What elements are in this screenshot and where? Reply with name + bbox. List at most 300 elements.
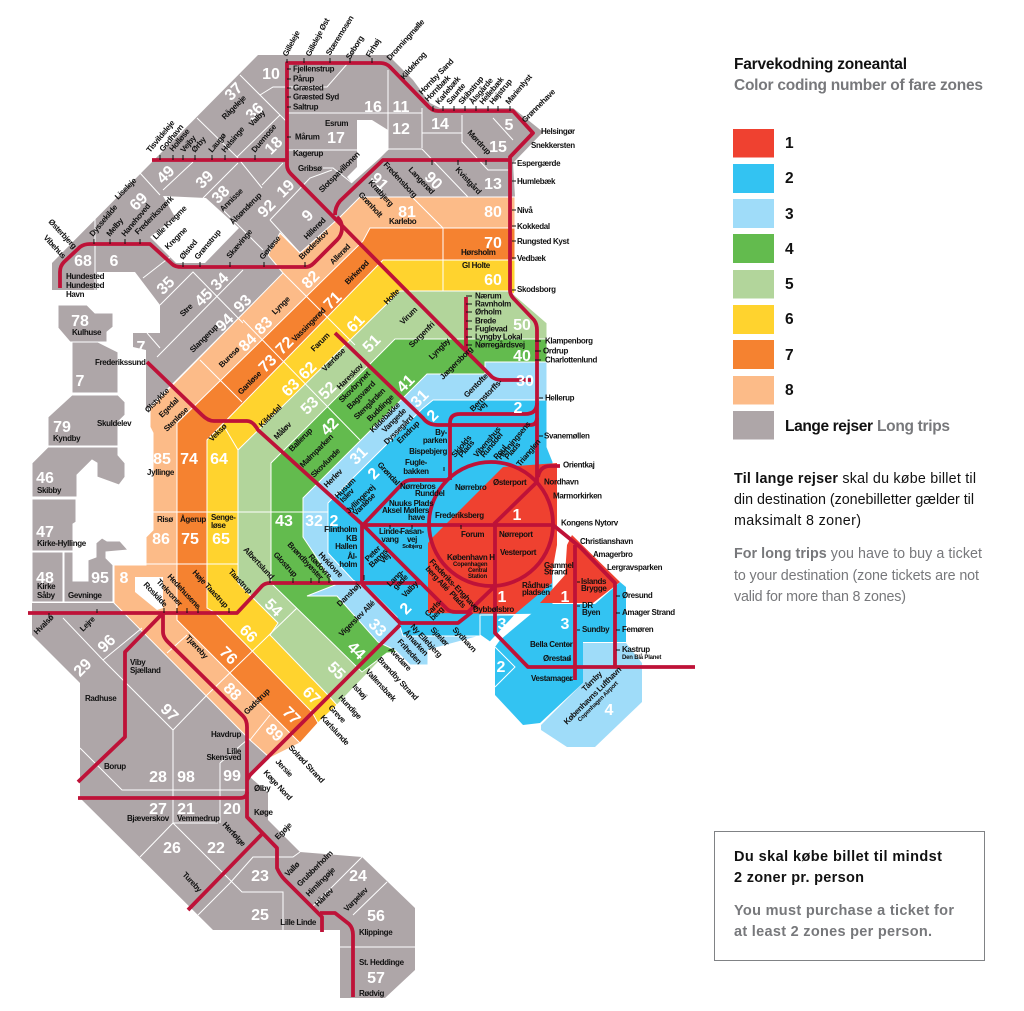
zone numbers: 21 <box>177 801 195 818</box>
zone numbers: 57 <box>367 970 385 987</box>
text: long trips note in English: to your destination (zone tickets are not <box>734 568 979 584</box>
station names: rotated up-right: Ganløse <box>236 369 264 396</box>
line: Flintholm south <box>360 525 364 584</box>
legend: colour swatches: 6 <box>785 311 794 328</box>
station names: rotated down-right: Enghave <box>453 583 481 613</box>
station names: rotated up-right: Vigerslev Allé <box>337 598 377 638</box>
station names: west Zealand: Gevninge <box>68 591 103 600</box>
station names: rotated up-right: Egøje <box>273 820 294 841</box>
station names: horizontal north and coast: Ørholm <box>475 308 502 316</box>
zone numbers: 85 <box>153 451 171 468</box>
station names: rotated up-right: Helsinge <box>220 124 247 154</box>
zone numbers: 93 <box>231 292 255 316</box>
zone numbers: 14 <box>431 116 449 133</box>
station names: horizontal north and coast: Kongens Nytorv <box>561 518 619 528</box>
zone numbers: 10 <box>262 66 280 83</box>
station names: rotated up-right: Sorgenfri <box>407 320 436 349</box>
station names: rotated up-right: Gadstrup <box>242 687 272 716</box>
line: Naerum <box>464 297 468 350</box>
zone numbers: 1 <box>498 589 507 606</box>
zone numbers: 27 <box>149 801 167 818</box>
station names: central Copenhagen: København H <box>447 553 495 562</box>
station names: rotated down-right: Brøndbyøster <box>286 540 325 582</box>
station names: central Copenhagen: Flintholm <box>324 525 357 534</box>
station names: rotated up-right: Melby <box>105 216 126 238</box>
zone numbers: 67 <box>299 684 323 708</box>
station names: rotated up-right: Birkerød <box>343 258 371 286</box>
zone numbers: 23 <box>251 868 269 885</box>
station names: rotated up-right: Ballerup <box>287 426 314 453</box>
station names: rotated up-right: Lejre <box>78 614 97 633</box>
station names: rotated up-right: Stæremosen <box>324 14 356 57</box>
line: Koge north <box>362 584 472 623</box>
station names: rotated up-right: Stengården <box>352 386 387 421</box>
station names: horizontal north and coast: Gribsø <box>298 164 322 173</box>
station names: rotated up-right: Hareskov <box>335 361 366 391</box>
legend: colour swatches: 3 <box>785 206 794 223</box>
station names: rotated up-right: Duemose <box>250 122 279 154</box>
station names: horizontal north and coast: Espergærde <box>517 159 561 168</box>
station names: rotated down-right: Glostrup <box>272 550 299 579</box>
station names: rotated down-right: Vibehus <box>42 233 68 261</box>
zones: ring 8 <box>114 197 515 758</box>
station names: rotated up-right: Ølsted <box>178 238 199 261</box>
zone numbers: 2 <box>497 659 506 676</box>
station names: rotated up-right: Slotspavillonen <box>317 150 362 194</box>
station names: Amager: Femøren <box>622 625 654 634</box>
station names: rotated up-right: Marienlyst <box>504 72 534 106</box>
station names: west Zealand: Kulhuse <box>72 328 102 337</box>
station names: horizontal north and coast: Orientkaj <box>563 460 595 470</box>
zone numbers: 1 <box>513 507 522 524</box>
line: Fredensborg <box>335 160 510 215</box>
text: long trips note in Danish: Til lange rejser skal du købe billet til <box>734 471 976 487</box>
zone numbers: 73 <box>256 352 280 376</box>
station names: horizontal north and coast: Snekkersten <box>531 141 575 150</box>
station names: central Copenhagen: pladsen <box>522 588 550 597</box>
zones: ring 1 centre <box>428 463 557 614</box>
legend: colour swatches: 2 <box>785 170 794 187</box>
holes in north zones <box>150 120 388 263</box>
station names: rotated up-right: Malmparken <box>298 432 335 469</box>
zone numbers: 38 <box>209 183 233 207</box>
legend: colour swatches: 8 <box>785 382 794 399</box>
station names: rotated up-right: Plads <box>457 438 477 459</box>
station names: rotated down-right: Tjæreby <box>184 633 210 661</box>
station names: central Copenhagen: Ål- <box>347 552 358 561</box>
station names: central Copenhagen: Aksel Møllers <box>382 506 430 515</box>
station names: horizontal north and coast: Lyngby Lokal <box>475 332 522 342</box>
station names: central Copenhagen: Bispebjerg <box>409 447 447 456</box>
station names: rotated down-right: Fredensborg <box>382 160 419 200</box>
zone numbers: 33 <box>365 616 389 640</box>
station names: Amager: Øresund <box>622 591 653 600</box>
station names: rotated up-right: Måløv <box>272 420 294 441</box>
station names: west Zealand: løse <box>211 521 227 530</box>
zone numbers: 66 <box>236 622 260 646</box>
station names: horizontal north and coast: Fjellenstrup <box>293 64 335 74</box>
station names: rotated down-right <box>42 128 493 895</box>
station names: Amager: Vestamager <box>531 674 573 683</box>
transit lines <box>28 63 695 997</box>
station names: Amager: Tårnby <box>580 669 604 693</box>
station names: rotated up-right: Karlebæk <box>434 74 463 106</box>
zone numbers: 7 <box>76 373 85 390</box>
station names: Amager: Sundby <box>582 625 610 634</box>
zone numbers: 20 <box>223 801 241 818</box>
line: Kege west <box>78 792 247 798</box>
station names: rotated down-right: Hvidovre <box>317 550 345 580</box>
station names: central Copenhagen: Linde- <box>379 527 402 536</box>
station names: horizontal north and coast: Hundested <box>66 281 105 290</box>
station names: horizontal north and coast: Svanemøllen <box>544 432 590 440</box>
zone numbers: 45 <box>192 286 216 310</box>
station names: central Copenhagen: vej <box>407 535 417 544</box>
station names: central Copenhagen: Fugle- <box>405 458 428 467</box>
station names: west Zealand: St. Heddinge <box>359 958 405 967</box>
station names: horizontal north and coast: Nærum <box>475 292 501 300</box>
zone numbers: 71 <box>321 289 345 313</box>
zones: long trips north <box>52 55 543 410</box>
line: Rodvig branch <box>320 913 353 997</box>
station names: Amager: Brygge <box>581 584 607 593</box>
zone numbers: 83 <box>252 314 276 338</box>
station names: rotated up-right: Holløse <box>168 127 192 153</box>
station names: rotated down-right: Køge Nord <box>262 768 294 802</box>
station names: rotated up-right: Rågeleje <box>220 93 248 121</box>
station names: west Zealand: Risø <box>157 515 173 524</box>
zone numbers: 86 <box>152 531 170 548</box>
station names: Amager: Ørestad <box>543 654 571 663</box>
zone numbers: 2 <box>514 400 523 417</box>
station names: rotated down-right: Albertslund <box>242 545 276 581</box>
station names: central Copenhagen: Nørrebros <box>400 482 436 491</box>
station names: west Zealand: Borup <box>104 762 126 771</box>
zone numbers: 69 <box>127 190 151 214</box>
station names: rotated up-right: Lang- <box>385 567 406 588</box>
station names: rotated up-right: Henningsens <box>496 419 533 461</box>
zone numbers: 40 <box>513 348 531 365</box>
zone numbers: 91 <box>367 170 391 194</box>
station names: west Zealand: Køge <box>254 808 274 817</box>
zone numbers: 46 <box>36 470 54 487</box>
station names: horizontal north and coast: Karlebo <box>389 217 417 226</box>
zone numbers: 12 <box>392 121 410 138</box>
station names: west Zealand: Viby <box>130 658 146 667</box>
station names: rotated up-right: Dronningmølle <box>385 17 427 62</box>
station names: horizontal north and coast: Kokkedal <box>517 222 550 231</box>
station names: central Copenhagen: holm <box>339 560 357 569</box>
station names: horizontal north and coast: Mårum <box>295 132 320 142</box>
station names: horizontal north and coast: Esrum <box>325 119 348 128</box>
station names: rotated up-right: Saunte <box>445 81 468 106</box>
legend: colour swatches: 4 <box>785 241 794 258</box>
station names: rotated down-right: Frederiks- <box>428 557 459 590</box>
zone numbers: 64 <box>210 451 228 468</box>
station ticks <box>49 58 620 680</box>
zone numbers: 36 <box>243 100 267 124</box>
station names: rotated down-right: Sydhavn <box>451 625 479 654</box>
station names: rotated up-right: Holte <box>382 287 402 306</box>
station names: central Copenhagen: parken <box>423 436 447 445</box>
zone numbers <box>36 66 614 987</box>
zone numbers: 6 <box>110 253 119 270</box>
station names: rotated down-right: Rødovre <box>307 552 334 581</box>
station names: rotated up-right: Skovlunde <box>309 446 342 479</box>
station names: rotated up-right: Varpelev <box>342 885 370 913</box>
line: Amager vertical <box>573 545 577 680</box>
station names: Amager: Kastrup <box>622 645 650 654</box>
zone numbers: 56 <box>367 908 385 925</box>
zone numbers: 7 <box>137 339 146 356</box>
zone numbers: 61 <box>344 312 368 336</box>
station names: rotated up-right: Himlingøje <box>304 865 337 898</box>
line: Frederikssund west <box>147 362 615 667</box>
station names: rotated down-right: Ny Ellebjerg <box>409 622 444 659</box>
zone numbers: 29 <box>71 656 95 680</box>
station names: west Zealand: Lille <box>227 747 242 756</box>
station names: rotated up-right: Farum <box>309 331 332 353</box>
station names: rotated up-right: Danshøj <box>335 581 362 608</box>
legend: colour swatches: Long trips <box>877 418 950 435</box>
legend: colour swatches: Lange rejser <box>785 418 873 435</box>
fare zone map <box>28 14 695 998</box>
zones: ring 4 <box>271 339 547 672</box>
station names: central Copenhagen: Rådhus- <box>522 581 552 590</box>
legend: colour swatches: 7 <box>785 347 794 364</box>
zone numbers: 37 <box>222 80 246 104</box>
zone numbers: 77 <box>279 704 303 728</box>
station names: rotated down-right: Sjælør <box>429 625 451 648</box>
zone numbers: 24 <box>349 868 367 885</box>
station names: horizontal north and coast: Nørregårdsvej <box>475 340 525 350</box>
station names: horizontal north and coast: Nordhavn <box>544 478 579 486</box>
zone numbers: 31 <box>347 444 371 468</box>
legend heading: Farvekodning zoneantal <box>734 56 907 73</box>
zone numbers: 25 <box>251 907 269 924</box>
station names: Amager: Københavns Lufthavn <box>562 665 623 726</box>
station names: rotated up-right: Bangs <box>367 546 390 569</box>
zone numbers: 98 <box>177 769 195 786</box>
zone numbers: 35 <box>154 274 178 298</box>
station names: rotated up-right: Lyngby <box>427 336 452 361</box>
station names: rotated up-right: Bagsværd <box>345 379 377 411</box>
station names: rotated down-right: Kratbjerg <box>367 178 396 208</box>
station names: west Zealand: Kirke <box>37 582 56 591</box>
zone numbers: 8 <box>120 570 129 587</box>
station names: rotated down-right: Langerød <box>407 165 436 196</box>
zones: long trips west <box>32 305 128 602</box>
station names: rotated up-right: Hillerød <box>302 216 328 241</box>
zone numbers: 84 <box>236 331 260 355</box>
zone numbers: 96 <box>95 632 119 656</box>
station names: horizontal north and coast: Ravnholm <box>475 300 511 308</box>
zone numbers: 2 <box>397 600 415 618</box>
station names: central Copenhagen: Østerport <box>493 478 527 487</box>
station names: rotated down-right: Høje Taastrup <box>191 568 230 610</box>
station names: west Zealand: Skibby <box>37 486 62 495</box>
station names: Amager: Den Blå Planet <box>622 654 661 661</box>
zone numbers: 3 <box>561 616 570 633</box>
station names: rotated up-right: Grønnehave <box>520 87 558 124</box>
text: long trips note in English: For long trips you have to buy a ticket <box>734 546 982 562</box>
station names: rotated up-right: Skjolds <box>450 433 474 459</box>
zones: ring 7 <box>177 228 515 743</box>
station names: Amager: Amagerbro <box>593 550 633 559</box>
station names: rotated down-right: Tureby <box>181 870 204 895</box>
zone divider lines <box>32 63 515 947</box>
zone numbers: 52 <box>316 379 340 403</box>
station names: rotated up-right: Hornbæk <box>423 73 453 103</box>
station names: rotated up-right: Buresø <box>217 345 242 369</box>
station names: rotated up-right: Ølstykke <box>143 386 172 414</box>
zone numbers: 2 <box>365 465 383 483</box>
station names: west Zealand: Ågerup <box>180 515 206 524</box>
station names: rotated up-right: Brødeskov <box>297 227 331 261</box>
zones: ring 3 <box>303 362 547 665</box>
station names: rotated down-right: Solrød Strand <box>287 743 326 785</box>
station names: rotated up-right <box>32 14 558 913</box>
callout box: Du skal købe billet til mindst <box>734 849 942 865</box>
legend: colour swatches: 1 <box>785 135 794 152</box>
station names: rotated up-right: Vibenshus <box>472 424 503 459</box>
zone numbers: 80 <box>484 204 502 221</box>
station names: rotated up-right: Skævinge <box>225 227 255 260</box>
zone numbers: 82 <box>299 268 323 292</box>
station names: central Copenhagen: Station <box>468 574 487 580</box>
zone numbers: 1 <box>561 589 570 606</box>
station names: rotated up-right: Værløse <box>320 346 348 373</box>
zone numbers: 28 <box>149 769 167 786</box>
station names: rotated up-right: Jyllingevej <box>344 483 377 515</box>
station names: west Zealand: Radhuse <box>85 694 117 703</box>
station names: rotated up-right: Skibstrup <box>457 74 486 106</box>
station names: central Copenhagen: Fasan- <box>400 527 425 536</box>
callout box: You must purchase a ticket for <box>734 903 954 919</box>
station names: rotated up-right: Grønstrup <box>193 228 223 261</box>
station names: rotated up-right: Egedal <box>157 396 181 419</box>
station names: west Zealand: Vemmedrup <box>177 814 220 823</box>
line: Hundested <box>60 217 342 288</box>
line: Viby <box>78 613 163 782</box>
station names: central Copenhagen <box>324 428 574 614</box>
station names: rotated up-right: Kildekrog <box>399 50 428 81</box>
station names: horizontal north and coast <box>66 64 619 528</box>
zone numbers: 54 <box>261 596 285 620</box>
station names: Amager: Islands <box>581 577 607 586</box>
station names: rotated up-right: Emdrup <box>395 419 422 445</box>
zone numbers: 70 <box>484 235 502 252</box>
station names: west Zealand <box>37 328 405 998</box>
zone numbers: 92 <box>255 197 279 221</box>
zone numbers: 63 <box>279 376 303 400</box>
line: Tureby <box>188 833 263 910</box>
zones: ring 5 <box>238 291 547 705</box>
station names: rotated up-right: Slangerup <box>188 322 220 354</box>
station names: west Zealand: Sjælland <box>130 666 161 675</box>
station names: Amager: Copenhagen Airport <box>577 681 620 723</box>
line: Valby horizontal west <box>28 583 422 613</box>
zones: Amager red <box>540 535 620 603</box>
text: long trips note in Danish: maksimalt 8 zoner) <box>734 513 861 529</box>
zone numbers: 44 <box>344 639 368 663</box>
line: Norrebro <box>363 480 447 525</box>
station names: rotated up-right: Dyssekilde <box>88 202 120 238</box>
station names: rotated down-right: Åmarken <box>402 628 430 658</box>
station names: rotated up-right: Vanløse <box>351 491 378 517</box>
station names: rotated up-right: Husum <box>333 476 358 500</box>
station names: horizontal north and coast: Ordrup <box>543 346 568 356</box>
zone numbers: 34 <box>208 270 232 294</box>
station names: Amager: Amager Strand <box>622 608 675 617</box>
station names: rotated up-right: Godhavn <box>158 122 186 153</box>
station names: rotated up-right: Laugø <box>207 131 228 154</box>
legend heading <box>734 56 983 94</box>
station names: rotated down-right: Vallensbæk <box>364 667 398 704</box>
station names: rotated down-right: Hedehusene <box>166 572 203 611</box>
zone numbers: 68 <box>74 253 92 270</box>
zone numbers: 74 <box>180 451 198 468</box>
station names: rotated up-right: Stre <box>178 301 195 318</box>
zone numbers: 51 <box>360 332 384 356</box>
station names: rotated up-right: Vej <box>378 552 392 565</box>
zones: Amager zone 4 <box>541 643 642 747</box>
zones: ring 2 <box>328 400 553 636</box>
station names: horizontal north and coast: Græsted Syd <box>293 92 339 102</box>
station names: rotated down-right: Jersie <box>274 757 295 779</box>
line: Kastrup east <box>495 524 695 667</box>
line: Gilleleje coast <box>287 63 537 482</box>
zone numbers: 72 <box>273 334 297 358</box>
station names: rotated up-right: Vejby <box>179 133 198 154</box>
station names: rotated down-right: berg Allé <box>424 564 452 594</box>
station names: rotated up-right: Stenløse <box>162 405 191 433</box>
zone numbers: 94 <box>213 311 237 335</box>
zone numbers: 88 <box>220 680 244 704</box>
line: Dybbolsbro upper <box>363 525 494 612</box>
station names: rotated down-right: Ishøj <box>351 682 369 701</box>
station names: horizontal north and coast: Gl Holte <box>462 261 491 270</box>
station names: horizontal north and coast: Havn <box>66 290 85 299</box>
zone numbers: 15 <box>489 139 507 156</box>
station names: central Copenhagen: have <box>408 513 426 522</box>
zone numbers: 75 <box>181 531 199 548</box>
callout box: 2 zoner pr. person <box>734 870 864 886</box>
station names: central Copenhagen: KB <box>346 534 358 543</box>
text: long trips note in Danish <box>734 471 976 529</box>
station names: rotated up-right: gade <box>391 572 410 591</box>
station names: rotated up-right: Trianglen <box>515 437 543 468</box>
station names: rotated up-right: Gørløse <box>258 234 283 261</box>
station names: west Zealand: Bjæverskov <box>127 814 170 823</box>
station names: horizontal north and coast: Skodsborg <box>517 285 556 294</box>
zone numbers: 43 <box>275 513 293 530</box>
station names: west Zealand: Frederikssund <box>95 358 146 367</box>
station names: rotated up-right: Dyssegård <box>382 413 415 446</box>
station names: central Copenhagen: Forum <box>461 530 484 539</box>
zone numbers: 3 <box>498 616 507 633</box>
line: Roskilde to Kege and Rodvig <box>163 613 322 932</box>
station names: horizontal north and coast: Hørsholm <box>461 248 496 257</box>
text: long trips note in Danish: din destination (zonebilletter gælder til <box>734 492 974 508</box>
station names: rotated up-right: Buddinge <box>365 392 396 423</box>
station names: central Copenhagen: By- <box>435 428 448 437</box>
station names: rotated up-right: Annisse <box>218 186 245 213</box>
zone numbers: 22 <box>207 840 225 857</box>
station names: rotated up-right: Højstrup <box>488 77 514 106</box>
station names: horizontal north and coast: Marmorkirken <box>553 492 602 500</box>
station names: west Zealand: Rødvig <box>359 989 384 998</box>
